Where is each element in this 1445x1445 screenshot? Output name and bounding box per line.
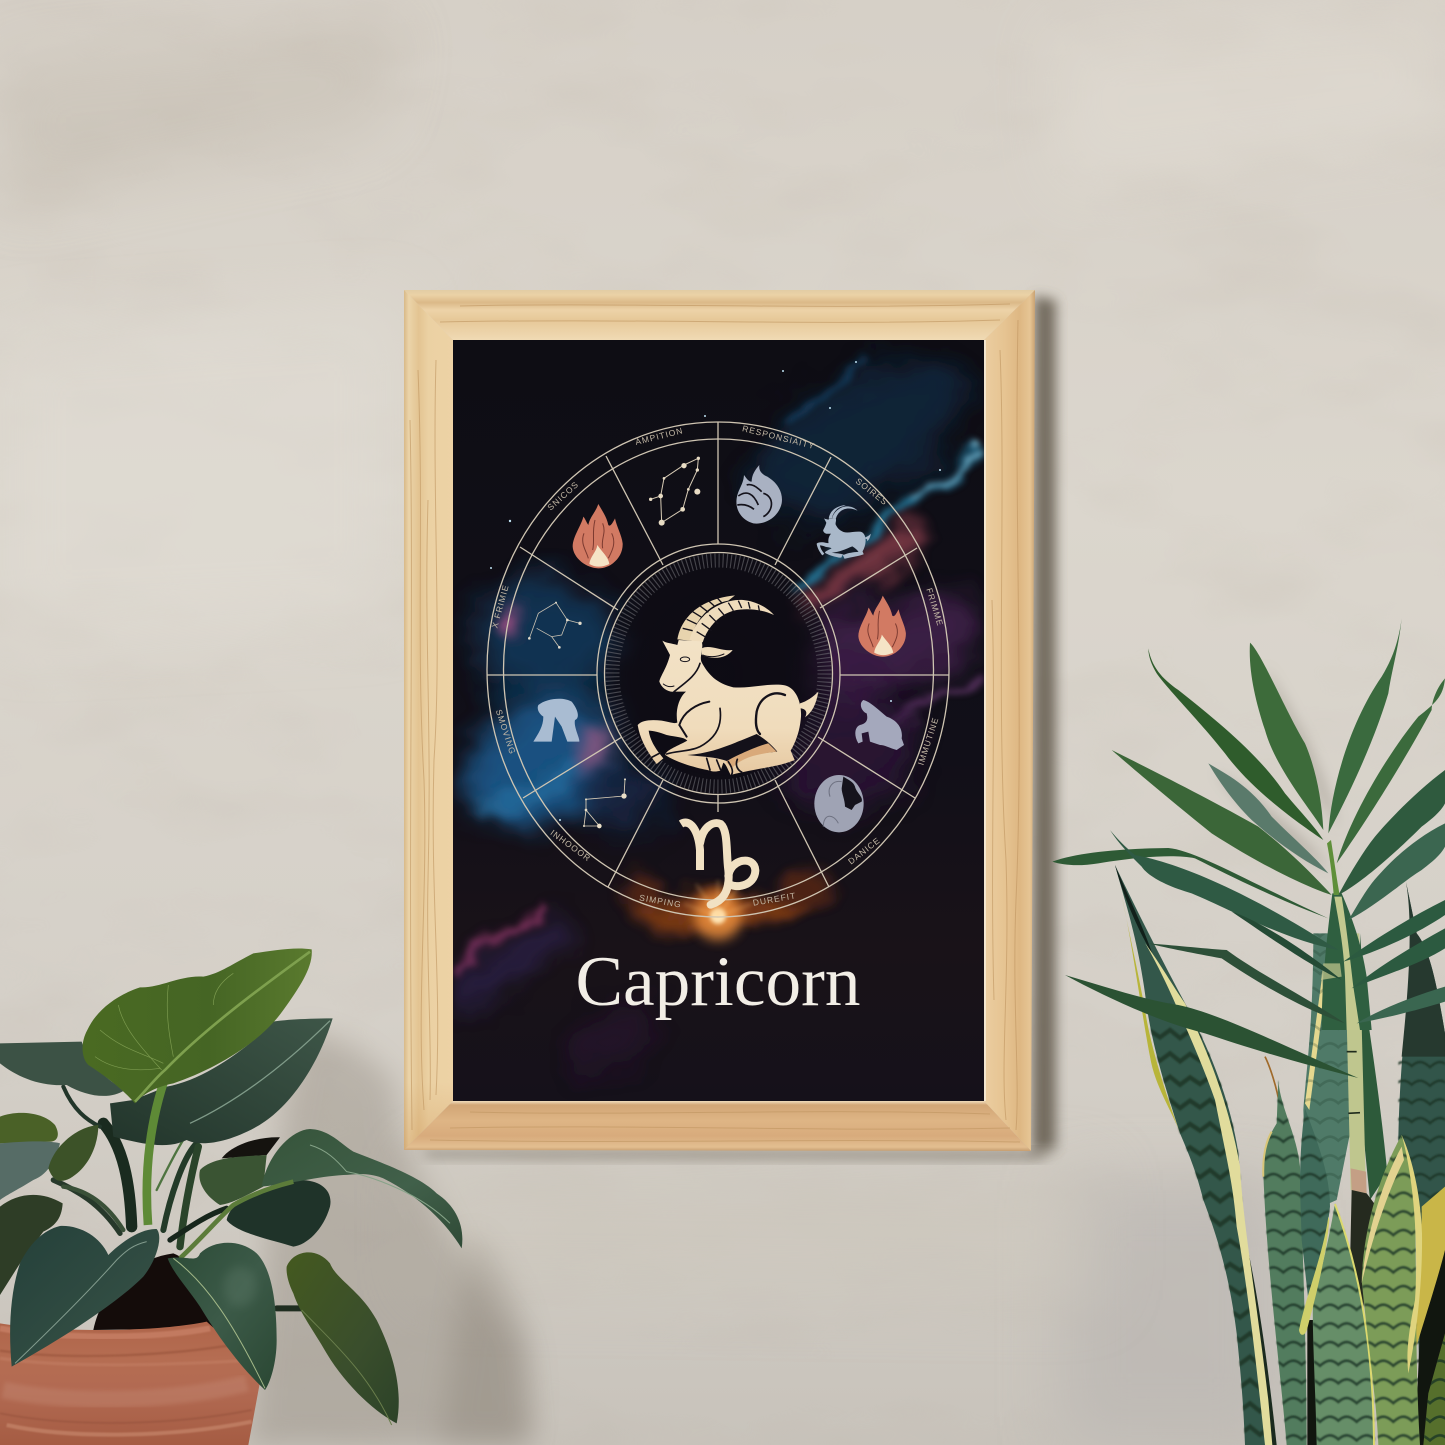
title: Capricorn (576, 943, 860, 1021)
ring labels: IMMUTINE (916, 716, 941, 766)
frond long leaflet upper left (1148, 648, 1323, 840)
right palm plant (1052, 618, 1445, 1078)
frond right leaflet 6 (1357, 987, 1445, 1023)
tick ring (612, 560, 824, 786)
main light stem (147, 1073, 167, 1225)
frond right leaflet 3 (1348, 823, 1445, 920)
frame top bar (404, 290, 1035, 340)
pale stalk (1345, 933, 1366, 1193)
goat tan leg (726, 743, 777, 768)
frond right leaflet 2 (1338, 770, 1445, 895)
frond long lowest leaflet (1065, 975, 1358, 1078)
goat belly shadow (687, 734, 777, 762)
nebula clouds (441, 326, 994, 1092)
terracotta pot (0, 1322, 261, 1445)
small thin tip leaf (1263, 1057, 1307, 1445)
poster (441, 326, 994, 1101)
leaf: top-left dark (0, 1042, 125, 1096)
ring labels: INHOOOR (549, 828, 593, 864)
goat horns (677, 595, 774, 642)
wooden frame (404, 290, 1035, 1151)
front center leaf (1299, 1203, 1375, 1445)
frond narrow leaflet (1232, 912, 1342, 980)
dark hollow behind leaf (222, 1137, 280, 1158)
icon: flame right (858, 596, 906, 657)
wheel rings and spokes (487, 422, 949, 917)
icon: moon emblem (814, 775, 864, 832)
soil (93, 1253, 214, 1330)
far right black gap (1415, 1233, 1445, 1445)
leaf: short olive (199, 1155, 267, 1205)
leaf: front center (168, 1243, 277, 1390)
icon: capricorn symbol (681, 823, 755, 905)
leaf: left lower dark (0, 1195, 63, 1295)
frame left bar (404, 290, 453, 1150)
leaf: lower right olive (287, 1252, 399, 1425)
frond lower leaflet (1148, 943, 1345, 1023)
left large leaf (1115, 865, 1272, 1445)
leaf: large back dark (110, 1018, 333, 1145)
icon: swirl emblem (736, 465, 782, 524)
icon: right figure (855, 700, 904, 750)
icon: left figure (533, 699, 579, 742)
frond right leaflet 1 (1337, 678, 1445, 863)
ring labels: SOIRES (854, 476, 890, 507)
icon: constellation left (528, 602, 582, 649)
upper icons (528, 457, 906, 657)
ring labels: RESPONSIAITY (741, 423, 816, 451)
lower icons (533, 699, 904, 905)
stalk dark base (1350, 1190, 1377, 1333)
palm trunk (1321, 840, 1372, 1030)
stalk pink base (1351, 1168, 1367, 1193)
right front leaf (1362, 1135, 1422, 1445)
leaf: front left large (10, 1226, 159, 1367)
frame shadow (420, 296, 1056, 1160)
frond grey leaflet (1208, 763, 1328, 873)
stalk nodes (1347, 1052, 1360, 1113)
ring labels: SIMPING (639, 892, 683, 910)
ring labels: SMOVING (494, 708, 518, 756)
icon: constellation lower (583, 778, 627, 828)
plant stems (53, 1087, 302, 1308)
far right yellow leaf (1408, 1187, 1445, 1373)
ring labels: DUREFIT (752, 890, 797, 908)
ring labels (489, 423, 945, 910)
frond right leaflet 4 (1343, 900, 1445, 962)
orange starburst (684, 880, 752, 940)
stars (490, 361, 941, 821)
palm spine dark side (1360, 933, 1387, 1200)
goat tail (800, 692, 818, 717)
ring labels: SNICOS (545, 479, 581, 512)
frond lower left leaflet (1110, 830, 1338, 950)
icon: small goat (817, 505, 871, 559)
black gap by center leaf (1307, 1320, 1322, 1445)
goat contour lines (652, 654, 785, 774)
leaf: left grey-green (0, 1141, 60, 1200)
far right dark leaf (1398, 882, 1445, 1445)
frame right bar (984, 290, 1035, 1151)
ring labels: AMPITION (634, 425, 684, 447)
center tall leaf (1303, 933, 1353, 1213)
left potted plant (0, 948, 462, 1445)
icon: constellation top (649, 457, 700, 526)
frond horizontal leaflet (1052, 848, 1328, 918)
frame bottom bar (404, 1101, 1031, 1151)
inner disc (605, 584, 832, 782)
frond top right leaflet (1328, 618, 1402, 833)
ring labels: FRIMME (924, 587, 945, 627)
leaf: left olive upper (48, 1125, 98, 1181)
frond right leaflet 5 (1352, 928, 1445, 988)
leaf: left olive small (0, 1113, 58, 1143)
goat body (638, 640, 801, 775)
shadow of left plant on wall (250, 1030, 532, 1445)
frond top left leaflet (1250, 643, 1323, 830)
leaf: large top green (83, 948, 312, 1103)
leaf: dark round under drooping leaf (227, 1180, 331, 1247)
olive petiole (180, 1182, 293, 1258)
icon: flame left (573, 504, 623, 568)
ring labels: X FRIMIE (489, 583, 511, 629)
zodiac wheel (487, 422, 949, 917)
right snake plant (1115, 865, 1445, 1445)
shadow of palm on wall (1215, 665, 1340, 870)
frond left leaflet (1112, 750, 1332, 895)
mid overlapping leaf (1300, 1108, 1330, 1300)
far right lower leaf (1423, 1333, 1445, 1445)
ring labels: DANICE (846, 835, 882, 866)
central goat (638, 595, 818, 775)
left leaf dark back edge (1243, 1230, 1277, 1445)
goat ear (702, 647, 733, 658)
leaf: long drooping (262, 1129, 462, 1248)
